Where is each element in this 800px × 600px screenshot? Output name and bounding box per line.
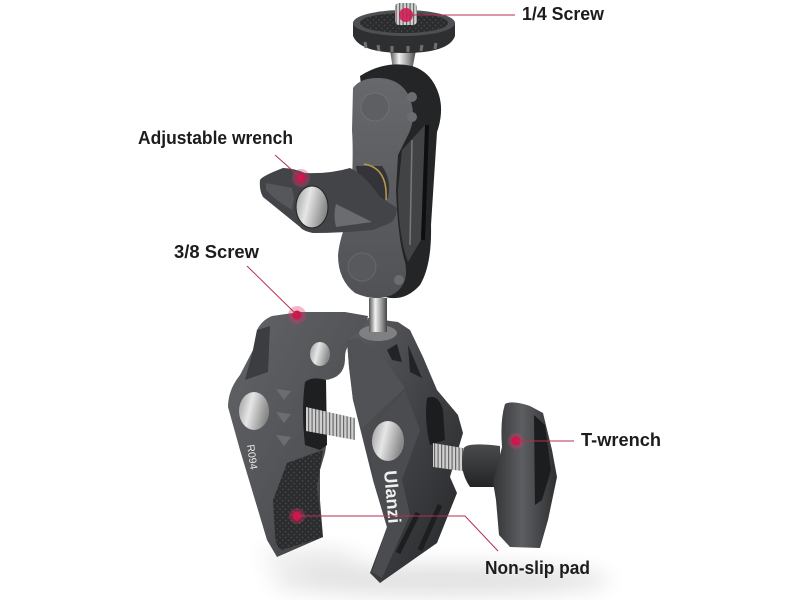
arm knuckle bolts <box>394 92 417 285</box>
threaded rod left <box>306 407 355 440</box>
plate top face <box>353 10 455 36</box>
wrench body <box>260 168 397 233</box>
wrench collar with gold ring <box>356 166 389 205</box>
right jaw <box>347 318 463 583</box>
left steel cap <box>239 392 269 430</box>
arm lower dimple <box>348 253 376 281</box>
callout: 1/4 Screw: 1/4 Screw <box>522 4 605 24</box>
non-slip pad <box>273 450 323 550</box>
callout: 3/8 Screw <box>174 242 306 324</box>
T-wrench handle <box>493 402 557 548</box>
T-wrench <box>462 402 557 548</box>
callout: Adjustable wrench: Adjustable wrench <box>138 128 293 148</box>
callout: Non-slip pad <box>289 508 590 578</box>
wrench right inset <box>334 204 372 227</box>
arm back section <box>360 64 441 298</box>
wrench left inset <box>266 183 294 210</box>
arm side ridges <box>398 124 426 262</box>
right jaw top wedge holes <box>387 344 422 378</box>
right jaw side window <box>426 397 445 445</box>
callout: Non-slip pad: Non-slip pad <box>485 558 590 578</box>
clamp <box>228 298 557 583</box>
ground shadow <box>260 550 610 596</box>
arm upper dimple <box>361 93 389 121</box>
left jaw teeth <box>276 389 291 446</box>
plate knurled side <box>353 23 455 53</box>
right steel cap <box>372 421 404 461</box>
T-wrench recess <box>534 415 551 505</box>
ball stem <box>390 50 416 76</box>
callout: Adjustable wrench <box>138 128 310 187</box>
mount arm with screw plate <box>338 3 455 298</box>
callout: T-wrench <box>508 430 661 450</box>
left jaw <box>228 312 368 557</box>
left jaw inner slot <box>303 378 327 450</box>
adjustable wrench <box>260 164 397 233</box>
right jaw face <box>347 338 405 428</box>
callout: 3/8 Screw: 3/8 Screw <box>174 242 260 262</box>
left jaw upper shading <box>245 326 270 380</box>
screw plate <box>353 3 455 53</box>
arm front plate <box>338 78 413 298</box>
mounting stud <box>359 298 397 341</box>
threaded rod right <box>433 443 469 472</box>
screw thread <box>395 3 417 25</box>
left pin <box>310 342 330 366</box>
wrench steel cap <box>296 186 328 228</box>
brand label Ulanzi: Ulanzi <box>380 470 405 524</box>
T-wrench stem <box>462 444 500 487</box>
model label R094: R094 <box>244 444 259 470</box>
right jaw grooves <box>398 505 440 553</box>
callout: T-wrench: T-wrench <box>581 430 661 450</box>
